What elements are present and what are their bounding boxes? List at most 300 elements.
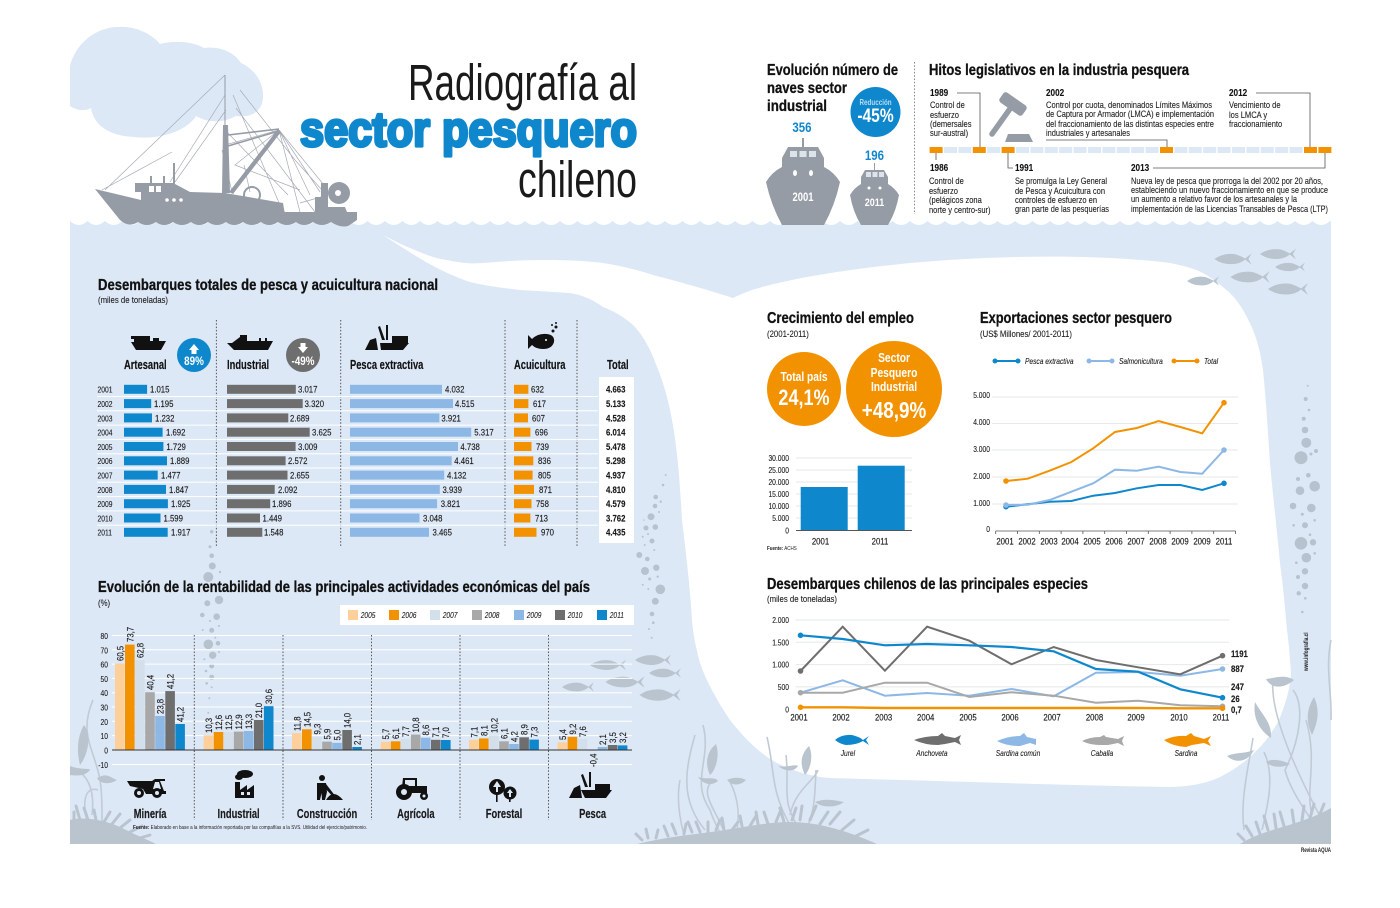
column: acuicultura: 713 [535, 513, 548, 524]
milestone 1991: controles de esfuerzo en [1015, 195, 1097, 205]
title: sector pesquero [300, 104, 637, 157]
milestone 1991: 1991 [1015, 162, 1033, 173]
line chart: especies: 2.000 [772, 615, 789, 625]
line chart: especies: 0 [785, 705, 789, 715]
bar chart: empleo: 20.000 [768, 477, 789, 487]
column: artesanal: 1.847 [169, 484, 189, 495]
column: total: 6.014 [606, 427, 626, 438]
callout: total país [767, 352, 841, 426]
sector labels: Agrícola [397, 808, 435, 821]
title: chileno [518, 151, 637, 208]
year labels: 2007 [98, 471, 112, 481]
line chart: especies: 2003 [875, 712, 892, 723]
gridlines and axis labels: 20 [101, 717, 108, 727]
column: pesca extractiva: 5.317 [474, 427, 494, 438]
year labels: 2009 [98, 499, 112, 509]
icon: industrial ship [227, 335, 273, 350]
line chart: exportaciones: 2004 [1061, 536, 1079, 547]
column: industrial: 2.092 [278, 484, 298, 495]
column: pesca extractiva: Pesca extractiva [350, 359, 424, 372]
bars: minería: 40,4 [145, 675, 156, 690]
line chart: exportaciones: 4.000 [973, 417, 990, 427]
column: acuicultura: 632 [531, 384, 544, 395]
sector labels [134, 808, 607, 821]
line chart: exportaciones: 3.000 [973, 444, 990, 454]
fish: anchoveta: Anchoveta [915, 748, 948, 758]
icon: trees [489, 779, 516, 802]
bars: minería: 62,8 [135, 643, 146, 658]
bars: industrial: 13,3 [243, 714, 254, 729]
callout: reducción 45% [850, 87, 900, 137]
milestone 2013: Nueva ley de pesca que prorroga la del 2002 por 20 años, [1131, 176, 1323, 186]
callout: total país: 24,1% [778, 386, 830, 410]
column: acuicultura: 617 [533, 398, 546, 409]
callout: -49%: -49% [292, 355, 315, 368]
bars: construcción: 2,1 [352, 734, 363, 745]
icon: small ship 2011: 2011 [865, 197, 885, 209]
decoration: fish shoal centre [562, 655, 681, 701]
milestone 2013: estableciendo un nuevo fraccionamiento en que se produce [1131, 185, 1328, 195]
milestone 1986: (pelágicos zona [929, 194, 982, 205]
column: artesanal: 1.232 [155, 413, 175, 423]
decoration: fish shoal upper right [1187, 249, 1308, 295]
column: artesanal: 1.692 [166, 427, 186, 438]
icon: fishing boat with net [365, 325, 409, 350]
bars: minería: 23,8 [155, 699, 166, 714]
milestone 2002: de Captura por Armador (LMCA) e implementación [1046, 109, 1214, 119]
decoration: seaweed bottom right [1227, 640, 1331, 844]
legend [992, 356, 1218, 366]
bars: forestal: 4,2 [509, 731, 520, 742]
milestone 2013 [1131, 162, 1328, 214]
column: acuicultura [514, 322, 566, 538]
decoration: bubbles column left [200, 530, 223, 714]
milestone 1986: esfuerzo [929, 185, 958, 196]
year labels: 2001 [98, 385, 112, 395]
column: pesca extractiva: 3.048 [423, 513, 443, 524]
column: total: 4.937 [606, 470, 626, 481]
milestone 2012 [1229, 87, 1283, 129]
callout: reducción 45%: Reducción [860, 97, 892, 107]
sector labels: Construcción [297, 808, 357, 821]
decoration: seaweed bottom left [70, 700, 156, 844]
bars: forestal: 6,1 [499, 728, 510, 739]
bars: minería: 73,7 [125, 627, 136, 642]
column: industrial: 1.548 [264, 527, 284, 538]
year labels: 2005 [98, 442, 112, 452]
bars: industrial: 21,0 [253, 703, 264, 718]
column: artesanal: 1.917 [171, 527, 191, 538]
year labels [98, 385, 112, 538]
column: total: 5.478 [606, 441, 626, 452]
gridlines and axis labels: -10 [98, 760, 108, 770]
bars: pesca: 7,6 [577, 726, 588, 737]
subtitle: (miles de toneladas) [767, 593, 837, 604]
icon: fish with bubbles [528, 322, 558, 349]
bars: industrial: 10,3 [203, 718, 214, 733]
column: total: 4.663 [606, 384, 626, 395]
line chart: exportaciones: 2003 [1040, 536, 1058, 547]
year labels: 2010 [98, 514, 112, 524]
line chart: exportaciones [973, 390, 1238, 547]
milestone 2013: 2013 [1131, 162, 1149, 173]
decoration: bubbles column centre [636, 474, 667, 639]
bars: construcción: 14,5 [302, 712, 313, 727]
column: artesanal: Artesanal [124, 359, 167, 372]
line chart: especies [772, 615, 1248, 723]
panel: exportaciones sector pesquero [973, 310, 1238, 547]
panel: crecimiento del empleo [767, 310, 942, 552]
callout: sector pesquero industrial [846, 341, 942, 437]
bar chart: empleo: 30.000 [768, 453, 789, 463]
column: artesanal: 1.477 [161, 470, 181, 481]
milestone 2013: un aumento a relativo favor de los artesanales y la [1131, 194, 1298, 204]
bars: minería: 41,2 [175, 707, 186, 722]
column: pesca extractiva: 3.465 [433, 527, 452, 538]
line chart: exportaciones: 1.000 [973, 498, 990, 508]
column: pesca extractiva: 3.821 [441, 498, 460, 509]
legend: 2005 [360, 610, 376, 620]
bar chart: empleo: 2011 [872, 536, 889, 547]
heading: empleo: Crecimiento del empleo [767, 310, 914, 327]
callout: total país: Total país [780, 371, 828, 384]
unit: (%) [98, 597, 110, 608]
bars: industrial: 12,5 [223, 715, 234, 730]
icon: large ship 2001: 2001 [793, 191, 814, 204]
callout: sector pesquero industrial: Sector [878, 352, 910, 365]
gridlines and axis labels [98, 631, 632, 820]
hull [95, 163, 357, 226]
line chart: especies: 2010 [1170, 712, 1188, 723]
legend: 2008 [484, 610, 500, 620]
icon: tractor [396, 778, 428, 800]
column: total: 4.810 [606, 484, 626, 495]
bars: agrícola: 7,0 [440, 727, 451, 738]
title: Radiografía al [408, 54, 637, 111]
column: acuicultura: 836 [538, 455, 551, 466]
sector labels: Forestal [486, 808, 522, 821]
heading: especies: Desembarques chilenos de las principales especies [767, 576, 1088, 593]
bars: minería: 41,2 [165, 674, 176, 689]
bar chart: empleo [768, 453, 912, 547]
icon: large ship 2001 [766, 119, 840, 225]
column: acuicultura: Acuicultura [514, 359, 566, 372]
year labels: 2011 [98, 528, 112, 538]
gridlines and axis labels: 80 [101, 631, 108, 641]
year labels: 2002 [98, 399, 112, 409]
bars: agrícola: 8,6 [420, 725, 431, 736]
bars: construcción: 9,3 [312, 724, 323, 734]
boom arm [229, 129, 281, 194]
line chart: especies: 2008 [1086, 712, 1103, 723]
bars: forestal: 10,2 [489, 718, 500, 733]
column: acuicultura: 805 [538, 470, 551, 481]
column: total: 5.298 [606, 455, 626, 466]
milestone 1991 [1015, 162, 1109, 214]
milestone 1986: norte y centro-sur) [929, 204, 991, 215]
line chart: especies: 247 [1231, 681, 1244, 692]
legend: 2011 [609, 610, 624, 620]
bar chart: empleo: 2001 [812, 536, 829, 547]
source note: Fuente: ACHS [767, 546, 797, 552]
bars: industrial: 12,9 [233, 714, 244, 730]
milestone 1991: de Pesca y Acuicultura con [1015, 186, 1105, 196]
line chart: exportaciones: 2006 [1105, 536, 1123, 547]
milestone 2002: 2002 [1046, 87, 1064, 98]
bars: forestal: 7,3 [529, 727, 540, 738]
bars: agrícola: 7,1 [430, 727, 441, 738]
milestone 1991: gran parte de las pesquerías [1015, 204, 1109, 214]
heading: exportaciones: Exportaciones sector pesquero [980, 310, 1172, 327]
milestone 1991: Se promulga la Ley General [1015, 176, 1107, 186]
bars: pesca: 9,2 [567, 724, 578, 734]
decoration: seaweed bottom centre [636, 725, 877, 844]
bars: forestal: 7,1 [469, 727, 480, 738]
line chart: exportaciones: 2002 [1018, 536, 1036, 547]
legend: Total [1204, 356, 1218, 366]
line chart: especies: 2011 [1213, 712, 1230, 723]
line chart: especies: 1191 [1231, 648, 1248, 659]
line chart: especies: 2007 [1043, 712, 1061, 723]
fish: sardina común: Sardina común [996, 748, 1040, 758]
panel: evolución número de naves [766, 62, 900, 225]
legend: Pesca extractiva [1025, 356, 1074, 366]
column: pesca extractiva: 4.738 [460, 441, 480, 452]
column: total [599, 359, 634, 543]
column: pesca extractiva: 4.515 [455, 398, 475, 409]
column: industrial: 3.625 [312, 427, 332, 438]
callout: sector pesquero industrial: +48,9% [862, 398, 927, 423]
ocean background [70, 221, 1331, 844]
bars: pesca: 5,4 [557, 729, 568, 740]
column: industrial: 2.572 [288, 455, 308, 466]
line chart: especies: 2004 [917, 712, 935, 723]
column: artesanal: 1.889 [170, 455, 190, 466]
milestone 2012: 2012 [1229, 87, 1247, 98]
milestone 1989: esfuerzo [930, 109, 959, 120]
line chart: especies: 887 [1231, 663, 1244, 674]
heading: naves [767, 62, 898, 115]
subtitle: (miles de toneladas) [98, 294, 168, 305]
column: industrial: 2.655 [290, 470, 310, 481]
milestone 1989: Control de [930, 99, 965, 110]
bars: construcción: 11,8 [292, 716, 303, 731]
icon: gavel [992, 91, 1033, 142]
milestone 2012: Vencimiento de [1229, 99, 1281, 110]
gridlines and axis labels: 50 [101, 674, 108, 684]
bars: pesca: 2,1 [597, 734, 608, 745]
column: pesca extractiva: 4.132 [447, 470, 467, 481]
column: acuicultura: 739 [536, 441, 549, 452]
legend: 2010 [567, 610, 583, 620]
credit: revista: Revista AQUA [1301, 848, 1331, 854]
fish: caballa [1082, 735, 1124, 758]
sector labels: Minería [134, 808, 167, 821]
column: acuicultura: 871 [539, 484, 552, 495]
leader lines [936, 93, 1325, 168]
panel: evolución de la rentabilidad [98, 579, 634, 831]
column: pesca extractiva: 4.461 [454, 455, 474, 466]
line chart: especies: 26 [1231, 693, 1240, 704]
bar chart: empleo: 5.000 [772, 513, 789, 523]
column: pesca extractiva [350, 325, 494, 538]
column: acuicultura: 758 [536, 498, 549, 509]
line chart: exportaciones: 2.000 [973, 471, 990, 481]
panel: desembarques principales especies [767, 576, 1248, 758]
legend: 2009 [526, 610, 542, 620]
bar chart: empleo: 15.000 [768, 489, 789, 499]
line chart: especies: 2005 [959, 712, 977, 723]
line chart: especies: 1.000 [772, 660, 789, 670]
bars: pesca [557, 724, 628, 767]
milestone 2002: del fraccionamiento de las distintas especies entre [1046, 119, 1214, 129]
line chart: exportaciones: 0 [986, 524, 990, 534]
gridlines and axis labels: 60 [101, 660, 108, 670]
milestone 2012: los LMCA y [1229, 109, 1268, 120]
fish: sardina: Sardina [1175, 748, 1197, 758]
bars: industrial: 12,6 [213, 715, 224, 730]
line chart: exportaciones: 2009 [1193, 536, 1211, 547]
milestone 1986: 1986 [930, 162, 948, 173]
line chart: especies: 2006 [1001, 712, 1019, 723]
milestone 1989 [930, 87, 971, 138]
bars: pesca: -0,4 [588, 753, 599, 767]
line chart: especies: 1.500 [772, 638, 789, 648]
source note: Fuente: Elaborado en base a la información reportada por las compañías a la SVS. Utilidad del ejercicio/patrimonio. [133, 825, 367, 831]
column: industrial: 1.449 [263, 513, 282, 524]
subtitle: (2001-2011) [767, 328, 809, 339]
fish: anchoveta [914, 733, 961, 758]
icon: small ship 2011: 196 [865, 147, 884, 163]
icon: large ship 2001: 356 [792, 119, 812, 135]
gridlines and axis labels: 70 [101, 646, 108, 655]
milestone 1986: Control de [929, 175, 964, 186]
bars: construcción: 5,9 [322, 729, 333, 740]
bars: agrícola: 7,7 [400, 726, 411, 737]
fish: jurel [835, 735, 869, 758]
line chart: exportaciones: 2009 [1171, 536, 1189, 547]
timeline bar [930, 147, 1331, 153]
bar chart: empleo: 0 [785, 526, 789, 536]
fish: sardina común [996, 733, 1040, 758]
bars: pesca: 3,5 [607, 732, 618, 743]
legend: Salmonicultura [1119, 356, 1163, 366]
bars: agrícola: 6,1 [390, 728, 401, 739]
heading: desembarques totales: Desembarques totales de pesca y acuicultura nacional [98, 277, 438, 294]
gridlines and axis labels: 10 [101, 731, 108, 741]
line chart: exportaciones: 2008 [1149, 536, 1167, 547]
credit: infografia: www.infografia.cl [1303, 632, 1310, 672]
column: total: 4.435 [606, 527, 626, 538]
gridlines and axis labels: 30 [101, 703, 108, 713]
line chart: especies: 2009 [1127, 712, 1145, 723]
panel: hitos legislativos [929, 62, 1331, 215]
milestone 2002 [1046, 87, 1214, 138]
rigging lines [102, 75, 328, 212]
callout: 89%: 89% [184, 355, 204, 368]
icon: artesanal boat [131, 336, 166, 350]
bars: minería [115, 627, 186, 750]
icon: factory [235, 770, 254, 798]
legend: 2007 [442, 610, 458, 620]
bars: industrial: 30,6 [263, 689, 274, 704]
column: total: 4.528 [606, 413, 626, 423]
trawler ship illustration [95, 75, 357, 226]
line chart: exportaciones: 2001 [996, 536, 1014, 547]
sector labels: Pesca [579, 808, 607, 821]
bars: pesca: 3,2 [617, 732, 628, 743]
legend [340, 605, 634, 625]
column: total: 5.133 [606, 398, 626, 409]
line chart: exportaciones: 2011 [1216, 536, 1233, 547]
column: artesanal: 1.925 [171, 498, 191, 509]
column: industrial: 2.689 [290, 413, 310, 423]
heading: naves: naves sector [767, 80, 847, 97]
column: pesca extractiva: 3.921 [441, 413, 461, 423]
milestone 1989: 1989 [930, 87, 948, 98]
column: industrial: Industrial [227, 359, 269, 372]
derrick [228, 129, 279, 146]
milestone 1989: sur-austral) [930, 127, 968, 138]
year labels: 2008 [98, 485, 112, 495]
gridlines and axis labels: 40 [101, 689, 108, 698]
column: artesanal [124, 336, 211, 538]
column: industrial: 3.009 [298, 441, 318, 452]
line chart: especies: 2001 [790, 712, 808, 723]
bar chart: empleo: 25.000 [768, 465, 789, 475]
column: acuicultura: 696 [535, 427, 548, 438]
column: industrial: 3.017 [298, 384, 318, 395]
heading: hitos: Hitos legislativos en la industria pesquera [929, 62, 1189, 79]
column: industrial: 1.896 [272, 498, 292, 509]
year labels: 2003 [98, 414, 112, 423]
heading: naves: industrial [767, 98, 827, 115]
bars: construcción: 5,0 [332, 730, 343, 740]
bars: forestal: 8,9 [519, 724, 530, 735]
milestone 2012: fraccionamiento [1229, 118, 1283, 129]
line chart: especies: 500 [778, 682, 789, 692]
milestone 2002: industriales y artesanales [1046, 128, 1130, 138]
icon: construction worker [317, 775, 343, 800]
subtitle: (US$ Millones/ 2001-2011) [980, 328, 1072, 339]
decoration: bubbles column right [1290, 385, 1320, 613]
sector labels: Industrial [218, 808, 260, 821]
bars: industrial [203, 689, 274, 750]
year labels: 2006 [98, 457, 112, 466]
column: pesca extractiva: 4.032 [445, 384, 465, 395]
panel: desembarques totales [97, 277, 634, 547]
line chart: especies: 0,7 [1231, 704, 1242, 715]
column: industrial: 3.320 [305, 398, 324, 409]
line chart: especies: 2002 [832, 712, 850, 723]
column: artesanal: 1.729 [166, 441, 186, 452]
main mast [222, 75, 230, 193]
year labels: 2004 [98, 428, 112, 438]
fish: caballa: Caballa [1091, 748, 1113, 758]
bars: forestal: 8,1 [479, 725, 490, 736]
callout: -49% [286, 338, 320, 372]
column: artesanal: 1.195 [154, 398, 174, 409]
callout: 89% [177, 338, 211, 372]
legend: 2006 [401, 610, 417, 620]
column: pesca extractiva: 3.939 [443, 484, 462, 495]
milestone 1986 [929, 162, 991, 215]
fish: jurel: Jurel [840, 748, 855, 758]
bars: agrícola [380, 717, 451, 750]
bars: forestal [469, 718, 540, 750]
gridlines and axis labels: 0 [104, 746, 108, 756]
callout: sector pesquero industrial: Industrial [871, 381, 917, 394]
